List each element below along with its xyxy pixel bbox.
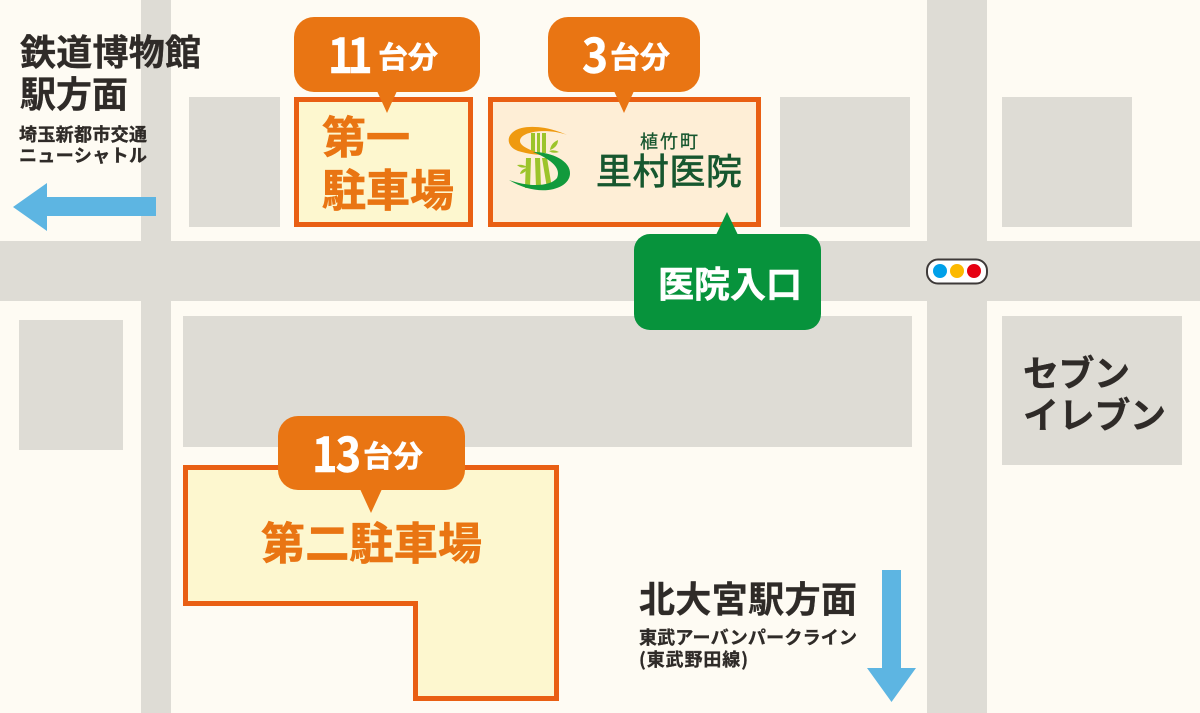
destination label: Kita-Omiya direction: (東武野田線) [639, 646, 748, 672]
callout: 11 spaces: 台分 [378, 33, 438, 77]
label: Seven-Eleven: イレブン [1023, 387, 1166, 439]
destination label: Kita-Omiya direction: 北大宮駅方面 [639, 571, 857, 623]
callout: 13 spaces [278, 416, 465, 513]
panel: first parking lot: 第一 [322, 102, 410, 166]
destination label: Railway Museum direction: 埼玉新都市交通 [19, 121, 147, 147]
panel: clinic [490, 100, 758, 224]
icon: clinic logo [509, 127, 570, 190]
callout: clinic entrance [634, 212, 821, 330]
panel: second parking lot: 第二駐車場 [261, 508, 482, 572]
callout: 3 spaces [548, 17, 700, 113]
destination label: Kita-Omiya direction: 東武アーバンパークライン [639, 624, 857, 650]
label: Seven-Eleven [1023, 345, 1166, 439]
arrow: west [13, 183, 156, 231]
panel: first parking lot [296, 100, 470, 224]
panel: clinic: 里村医院 [596, 143, 742, 195]
panel: second parking lot [186, 468, 556, 698]
callout: 11 spaces: 11 [328, 19, 370, 88]
callout: clinic entrance: 医院入口 [658, 256, 802, 308]
callout: 11 spaces [294, 17, 480, 113]
neighbouring building blocks [19, 97, 1182, 465]
panel: clinic: 植竹町 [640, 128, 698, 154]
arrow: south [867, 570, 916, 702]
destination label: Railway Museum direction: 駅方面 [20, 66, 128, 118]
label: Seven-Eleven: セブン [1023, 345, 1130, 397]
icon: traffic light [927, 260, 987, 284]
destination label: Railway Museum direction [19, 24, 201, 168]
destination label: Railway Museum direction: 鉄道博物館 [20, 24, 201, 76]
callout: 3 spaces: 3 [582, 19, 608, 88]
callout: 13 spaces: 13 [312, 417, 359, 487]
panel: first parking lot: 駐車場 [322, 155, 454, 219]
destination label: Kita-Omiya direction [639, 571, 857, 672]
destination label: Railway Museum direction: ニューシャトル [19, 142, 147, 168]
callout: 3 spaces: 台分 [610, 33, 670, 77]
callout: 13 spaces: 台分 [363, 432, 423, 476]
